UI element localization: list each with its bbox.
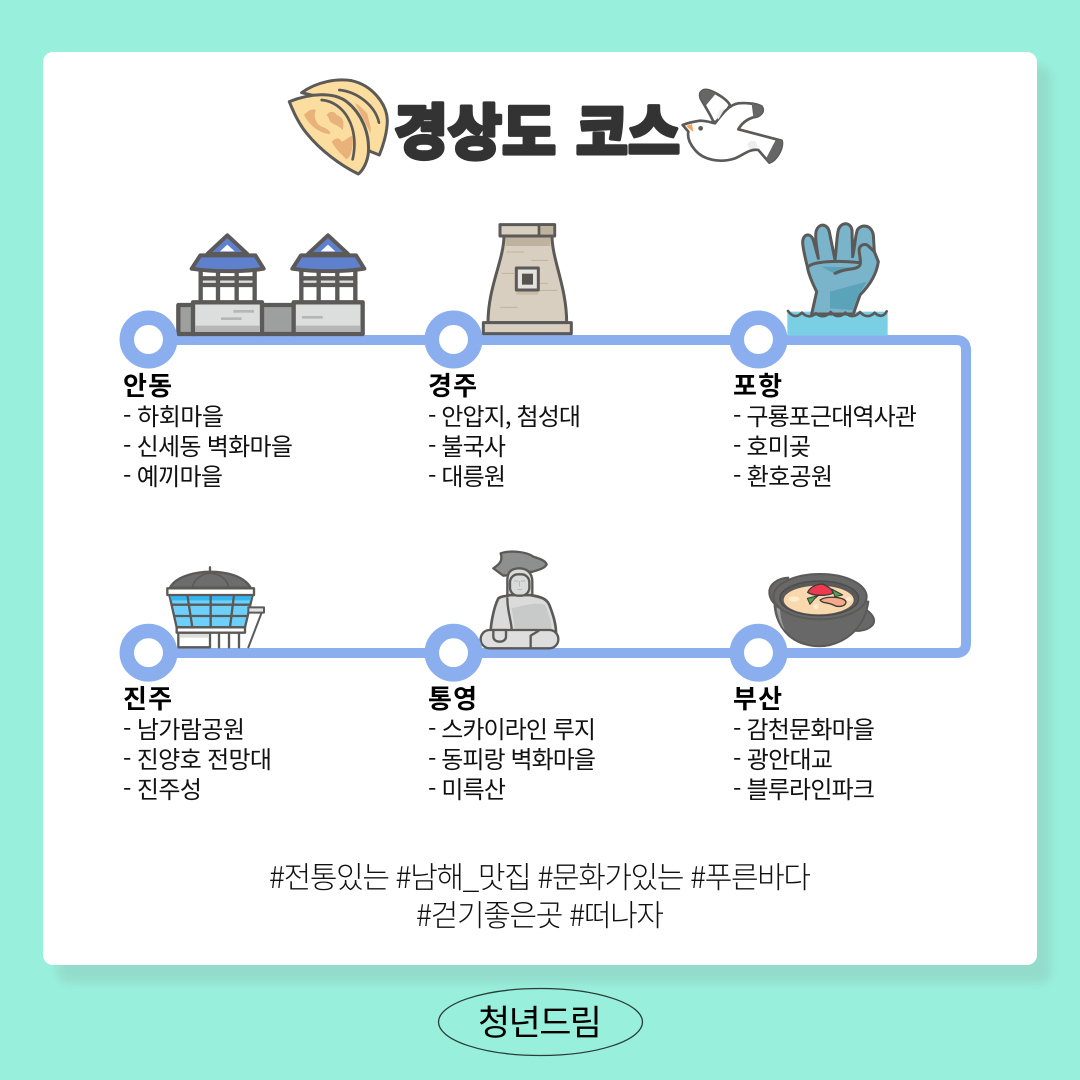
text block: Tongyeong: - 스카이라인 루지 [428, 710, 596, 745]
panel: white card [43, 52, 1037, 965]
text block: Andong: - 하회마을 [123, 397, 224, 432]
text block: Jinju [123, 679, 272, 805]
text block: Tongyeong [428, 679, 596, 805]
text block: Tongyeong: - 미륵산 [428, 770, 506, 805]
text block: Busan [733, 679, 875, 805]
text block: Busan: 부산 [733, 679, 782, 716]
text block: Jinju: - 남가람공원 [123, 710, 245, 745]
text block: Gyeongju: - 대릉원 [428, 457, 506, 492]
hashtags: #전통있는 #남해_맛집 #문화가있는 #푸른바다 [269, 853, 811, 897]
icon: Andong hanok gates [178, 235, 364, 334]
text block: Gyeongju: - 불국사 [428, 427, 506, 462]
text block: Andong: - 예끼마을 [123, 457, 223, 492]
stop marker: Tongyeong [432, 631, 475, 674]
text block: Jinju: 진주 [123, 679, 172, 716]
icon: Jinju observatory [167, 567, 264, 647]
text block: Andong: 안동 [123, 366, 172, 403]
hashtags: #걷기좋은곳 #떠나자 [416, 891, 664, 935]
stop marker: Gyeongju [432, 318, 475, 361]
stop marker: Andong [127, 318, 170, 361]
text block: Gyeongju [428, 366, 581, 492]
icon: Homigot hand in the sea [787, 224, 888, 336]
icon: Tongyeong seated statue [481, 552, 558, 648]
title: 코스 [576, 85, 680, 172]
stop marker: Pohang [737, 318, 780, 361]
text block: Pohang: - 호미곶 [733, 427, 811, 462]
logo: 청년드림: 청년드림 [478, 995, 602, 1046]
text block: Busan: - 감천문화마을 [733, 710, 875, 745]
card shadow [57, 66, 1051, 983]
text block: Tongyeong: - 동피랑 벽화마을 [428, 740, 596, 775]
route line [148, 340, 966, 653]
hashtags [269, 853, 811, 935]
text block: Gyeongju: 경주 [428, 366, 477, 403]
text block: Andong [123, 366, 293, 492]
icon: Busan hot pot [769, 574, 874, 646]
text block: Andong: - 신세동 벽화마을 [123, 427, 293, 462]
text block: Pohang [733, 366, 917, 492]
text block: Busan: - 블루라인파크 [733, 770, 875, 805]
text block: Pohang: - 환호공원 [733, 457, 833, 492]
icon: Cheomseongdae tower [483, 225, 571, 334]
text block: Busan: - 광안대교 [733, 740, 833, 775]
icon: seagull [683, 90, 782, 163]
text block: Jinju: - 진주성 [123, 770, 202, 805]
logo: 청년드림 [438, 988, 642, 1056]
icon: dumplings [289, 80, 387, 174]
text block: Gyeongju: - 안압지, 첨성대 [428, 397, 581, 432]
stop marker: Jinju [127, 631, 170, 674]
text block: Pohang: 포항 [733, 366, 782, 403]
stop marker: Busan [737, 631, 780, 674]
title: 경상도 [394, 85, 556, 172]
text block: Jinju: - 진양호 전망대 [123, 740, 272, 775]
title [394, 85, 680, 172]
text block: Pohang: - 구룡포근대역사관 [733, 397, 917, 432]
text block: Tongyeong: 통영 [428, 679, 477, 716]
